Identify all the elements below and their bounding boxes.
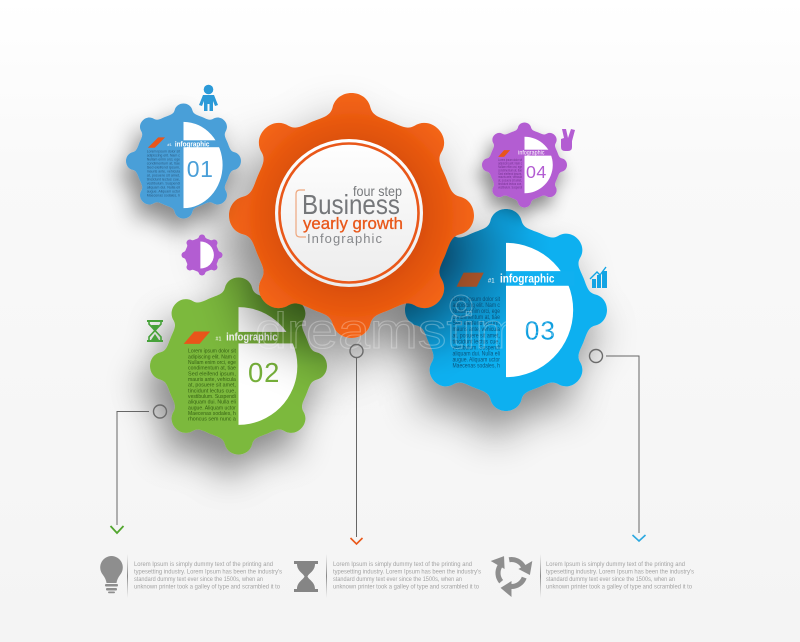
gear body: [229, 93, 474, 338]
paragraph: Lorem ipsum dolor sit: [452, 296, 500, 303]
title: Business: Business: [302, 189, 400, 220]
paragraph: aliquam dui. Nulla eli: [188, 400, 236, 406]
paragraph: [452, 296, 500, 370]
ribbon band: [184, 140, 223, 147]
title: yearly growth: yearly growth: [303, 215, 403, 233]
text block 1: typesetting industry. Lorem Ipsum has been the industry's: [134, 570, 282, 576]
text block 3: Lorem Ipsum is simply dummy text of the printing and: [546, 562, 685, 568]
title: Infographic: Infographic: [307, 231, 382, 246]
paragraph: [147, 149, 181, 198]
ribbon band: [524, 150, 553, 156]
white half disc: [506, 243, 573, 377]
badge: [184, 331, 210, 344]
paragraph: Nullam enim orci, ege: [498, 165, 522, 169]
paragraph: Sed eleifend ipsum,: [452, 320, 500, 327]
paragraph: tincidunt lectus cue,: [498, 182, 522, 186]
icon: green hourglass: [147, 321, 163, 341]
icon: bar chart growth: [590, 267, 607, 288]
text block 3: unknown printer took a galley of type and scrambled it to: [546, 584, 693, 590]
paragraph: Sed eleifend ipsum,: [188, 371, 236, 377]
ribbon index: #1: [215, 336, 221, 342]
paragraph: mauris ante, vehicula: [147, 169, 181, 174]
ribbon band: [506, 271, 575, 286]
paragraph: mauris ante, vehicula: [498, 175, 522, 179]
paragraph: Sed eleifend ipsum,: [147, 165, 180, 169]
paragraph: vestibulum. Suspendi: [498, 185, 522, 189]
ribbon label: infographic: [226, 331, 278, 343]
gear body: [150, 278, 327, 454]
paragraph: mauris ante, vehicula: [452, 326, 500, 333]
paragraph: aliquam dui. Nulla eli: [147, 186, 180, 190]
text block 1: [134, 562, 282, 590]
ribbon index: #1: [488, 279, 495, 285]
white half disc: [524, 137, 553, 193]
paragraph: Maecenas sodales, h: [147, 194, 180, 198]
badge: [498, 150, 510, 157]
paragraph: Nullam enim orci, ege: [188, 360, 236, 366]
paragraph: condimentum at, tiae: [147, 161, 180, 165]
paragraph: augue. Aliquam uctor: [188, 405, 236, 411]
number: 02: [248, 357, 280, 388]
divider 1: [127, 554, 128, 598]
badge: [457, 273, 484, 287]
text block 3: standard dummy text ever since the 1500s, when an: [546, 577, 675, 583]
paragraph: adipiscing elit. Nam c: [147, 153, 180, 157]
paragraph: vestibulum. Suspendi: [452, 344, 500, 351]
paragraph: Maecenas sodales, h: [188, 411, 236, 417]
number: 01: [187, 156, 214, 182]
paragraph: [498, 158, 522, 189]
paragraph: aliquam dui. Nulla eli: [452, 350, 500, 357]
white half disc: [184, 122, 223, 208]
connector: green: [110, 405, 166, 533]
paragraph: condimentum at, tiae: [498, 168, 522, 172]
paragraph: at, posuere sit amet,: [147, 174, 180, 178]
paragraph: at, posuere sit amet,: [498, 179, 522, 183]
connector: orange: [350, 344, 363, 544]
gear 03: blue: [405, 209, 607, 411]
paragraph: augue. Aliquam uctor: [147, 190, 181, 194]
central gear: orange: [229, 93, 474, 338]
paragraph: vestibulum. Suspendi: [188, 394, 236, 400]
paragraph: Lorem ipsum dolor sit: [147, 149, 181, 153]
paragraph: at, posuere sit amet,: [188, 383, 236, 389]
connector: blue: [590, 350, 646, 541]
number: 03: [525, 315, 556, 345]
white half disc: [238, 307, 297, 425]
orange ring: [280, 144, 418, 282]
paragraph: Sed eleifend ipsum,: [498, 172, 522, 176]
gear body: [482, 122, 567, 208]
number: 04: [526, 162, 547, 182]
divider 2: [326, 554, 327, 598]
text block 1: Lorem Ipsum is simply dummy text of the printing and: [134, 562, 273, 568]
small purple half gear: [182, 234, 222, 276]
paragraph: Nullam enim orci, ege: [147, 157, 180, 161]
ribbon index: #1: [167, 142, 173, 147]
paragraph: adipiscing elit. Nam c: [452, 302, 500, 309]
ribbon label: infographic: [500, 273, 555, 286]
text block 2: Lorem Ipsum is simply dummy text of the printing and: [333, 562, 472, 568]
paragraph: condimentum at, tiae: [188, 366, 236, 372]
gear body: [182, 234, 222, 276]
text block 3: [546, 562, 694, 590]
icon: person: [199, 85, 218, 111]
text block 1: standard dummy text ever since the 1500s, when an: [134, 577, 263, 583]
gear body: [126, 104, 241, 218]
paragraph: Lorem ipsum dolor sit: [498, 158, 522, 162]
paragraph: adipiscing elit. Nam c: [188, 354, 236, 360]
watermark: dreamstime: [255, 303, 555, 359]
text block 3: typesetting industry. Lorem Ipsum has been the industry's: [546, 570, 694, 576]
text block 2: [333, 562, 481, 590]
icon: light bulb: [100, 556, 123, 593]
paragraph: Maecenas sodales, h: [452, 363, 500, 370]
icon: cycle arrows: [487, 554, 532, 599]
gear body: [405, 209, 607, 411]
ribbon label: infographic: [518, 149, 545, 156]
paragraph: adipiscing elit. Nam c: [498, 162, 522, 166]
badge: [148, 137, 165, 148]
paragraph: mauris ante, vehicula: [188, 377, 237, 383]
central badge: [275, 139, 423, 287]
bracket: [296, 190, 306, 237]
paragraph: tincidunt lectus cue,: [452, 338, 500, 345]
paragraph: vestibulum. Suspendi: [147, 182, 180, 186]
ribbon label: infographic: [175, 140, 209, 149]
white half disc: [200, 241, 214, 269]
icon: peace hand: [561, 129, 575, 151]
paragraph: tincidunt lectus cue,: [188, 388, 236, 394]
gear 01: blue: [126, 104, 241, 218]
paragraph: tincidunt lectus cue,: [147, 178, 180, 182]
text block 1: unknown printer took a galley of type and scrambled it to: [134, 584, 281, 590]
paragraph: augue. Aliquam uctor: [452, 357, 500, 364]
outer white disc: [275, 139, 423, 287]
paragraph: rhoncus sem nunc a: [188, 417, 237, 423]
paragraph: condimentum at, tiae: [452, 314, 500, 321]
paragraph: Nullam enim orci, ege: [452, 308, 500, 315]
icon: grey hourglass: [294, 561, 318, 592]
paragraph: at, posuere sit amet,: [452, 332, 500, 339]
text block 2: standard dummy text ever since the 1500s, when an: [333, 577, 462, 583]
paragraph: Lorem ipsum dolor sit: [188, 349, 236, 355]
text block 2: unknown printer took a galley of type and scrambled it to: [333, 584, 480, 590]
ribbon band: [238, 332, 299, 343]
divider 3: [540, 554, 541, 598]
paragraph: [188, 349, 237, 423]
gear 04: purple: [482, 122, 567, 208]
text block 2: typesetting industry. Lorem Ipsum has been the industry's: [333, 570, 481, 576]
gear 02: green: [150, 278, 327, 454]
title: four step: four step: [353, 183, 402, 199]
